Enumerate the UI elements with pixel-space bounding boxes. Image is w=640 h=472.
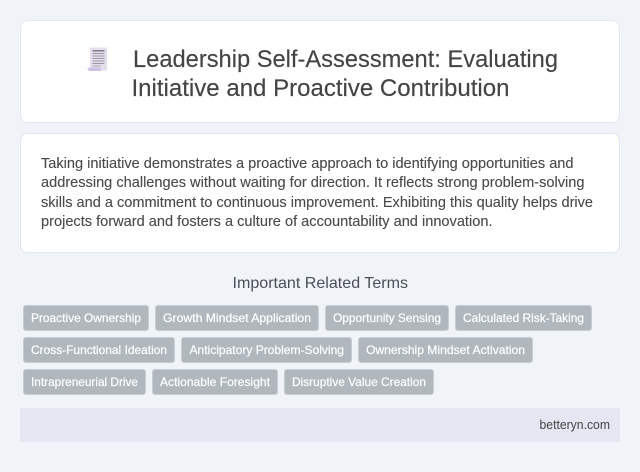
- tag: Ownership Mindset Activation: [358, 338, 532, 362]
- tag: Disruptive Value Creation: [284, 370, 434, 394]
- tag: Opportunity Sensing: Opportunity Sensing: [333, 311, 441, 325]
- tag: Intrapreneurial Drive: Intrapreneurial Drive: [31, 375, 138, 389]
- footer: [20, 408, 620, 442]
- heading: related terms: Important Related Terms: [232, 275, 408, 292]
- tag: Actionable Foresight: [152, 370, 278, 394]
- title: Initiative and Proactive Contribution: [132, 75, 510, 102]
- text block: description: projects forward and fosters a culture of accountability and innovation.: [41, 214, 492, 230]
- tag: Calculated Risk-Taking: Calculated Risk-Taking: [463, 311, 584, 325]
- footer text: site name: betteryn.com: [540, 418, 610, 432]
- tag list: [24, 306, 592, 394]
- tag: Cross-Functional Ideation: Cross-Functional Ideation: [31, 343, 167, 357]
- tag: Anticipatory Problem-Solving: Anticipatory Problem-Solving: [190, 343, 344, 357]
- tag: Proactive Ownership: [24, 306, 148, 330]
- text block: description: skills and a commitment to continuous improvement. Exhibiting this quality helps drive: [41, 195, 593, 211]
- panel: description: [20, 134, 620, 252]
- tag: Calculated Risk-Taking: [456, 306, 592, 330]
- text block: description: Taking initiative demonstrates a proactive approach to identifying opportunities and: [41, 156, 574, 172]
- tag: Growth Mindset Application: [156, 306, 318, 330]
- text block: description: addressing challenges without waiting for direction. It reflects strong problem-solving: [41, 175, 584, 191]
- tag: Proactive Ownership: Proactive Ownership: [31, 311, 141, 325]
- tag: Actionable Foresight: Actionable Foresight: [160, 375, 271, 389]
- tag: Growth Mindset Application: Growth Mindset Application: [163, 311, 311, 325]
- tag: Cross-Functional Ideation: [24, 338, 174, 362]
- tag: Anticipatory Problem-Solving: [182, 338, 352, 362]
- title: [132, 46, 558, 102]
- icon: document scroll: [88, 48, 107, 71]
- tag: Intrapreneurial Drive: [24, 370, 146, 394]
- text block: description: [41, 156, 593, 230]
- tag: Disruptive Value Creation: Disruptive Value Creation: [292, 375, 426, 389]
- tag: Opportunity Sensing: [326, 306, 448, 330]
- panel: title card: [20, 20, 620, 122]
- tag: Ownership Mindset Activation: Ownership Mindset Activation: [366, 343, 525, 357]
- title: Leadership Self-Assessment: Evaluating: [133, 46, 558, 73]
